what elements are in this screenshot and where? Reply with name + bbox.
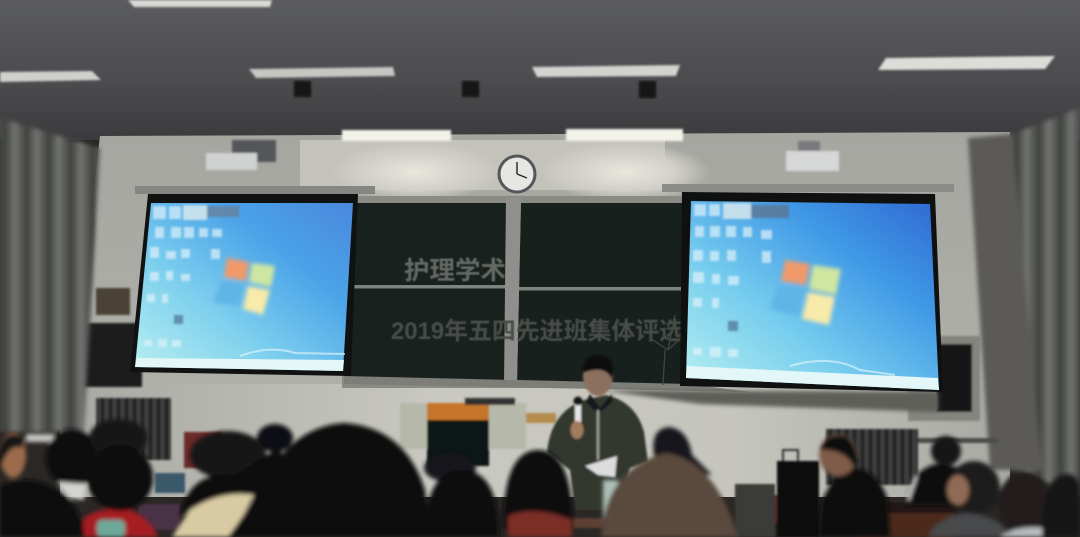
student at far right (998, 472, 1050, 536)
blackboards (342, 196, 750, 392)
distant student (653, 427, 712, 475)
teal bottle (97, 520, 125, 537)
student with glasses (948, 461, 1000, 515)
right curtain (968, 108, 1080, 500)
bottle on desk (603, 480, 618, 520)
audience left (0, 419, 573, 537)
front desks (138, 473, 957, 537)
student in black at right (818, 468, 890, 537)
taskbar detail (240, 350, 345, 356)
dark floor and desks base (0, 497, 1080, 537)
ceiling (0, 0, 1080, 140)
right radiator (826, 429, 998, 485)
windows logo (770, 260, 841, 325)
projectors (206, 140, 839, 171)
screen rail right (662, 184, 954, 192)
chalk tree sketch (650, 315, 683, 385)
left projection screen (130, 194, 358, 376)
taskbar detail (790, 361, 895, 375)
shadow under right screen (600, 390, 938, 412)
left radiator (96, 398, 171, 460)
microphone (575, 404, 581, 424)
student red jacket (82, 509, 158, 537)
lectern (400, 398, 556, 466)
left curtain (0, 118, 100, 432)
cream coat (172, 494, 254, 537)
audience right (601, 427, 1080, 537)
left foreground head (0, 480, 84, 537)
wall clock (498, 154, 536, 194)
windows logo (213, 258, 275, 315)
red bin (184, 432, 222, 468)
white desk papers (26, 434, 54, 442)
wall speakers and panels (80, 288, 980, 421)
speaker: man with microphone (547, 355, 648, 510)
right projection screen (680, 192, 943, 392)
red hood (508, 511, 572, 537)
large foreground head (228, 423, 430, 537)
middle heads (257, 424, 293, 452)
desktop icons (144, 205, 239, 347)
chalk heading: 护理学术 (404, 257, 506, 285)
hand (570, 421, 584, 439)
brown-haired student (601, 453, 738, 537)
paper (585, 456, 617, 477)
chalk subtitle: 2019年五四先进班集体评选 (391, 318, 683, 345)
ceiling lights (0, 0, 1055, 141)
black wheeled speaker (757, 450, 819, 537)
ceiling cameras (294, 81, 656, 98)
left seated student face (0, 432, 26, 478)
screen rail (135, 186, 375, 194)
desktop icons (693, 203, 789, 357)
back wall (60, 132, 1010, 500)
